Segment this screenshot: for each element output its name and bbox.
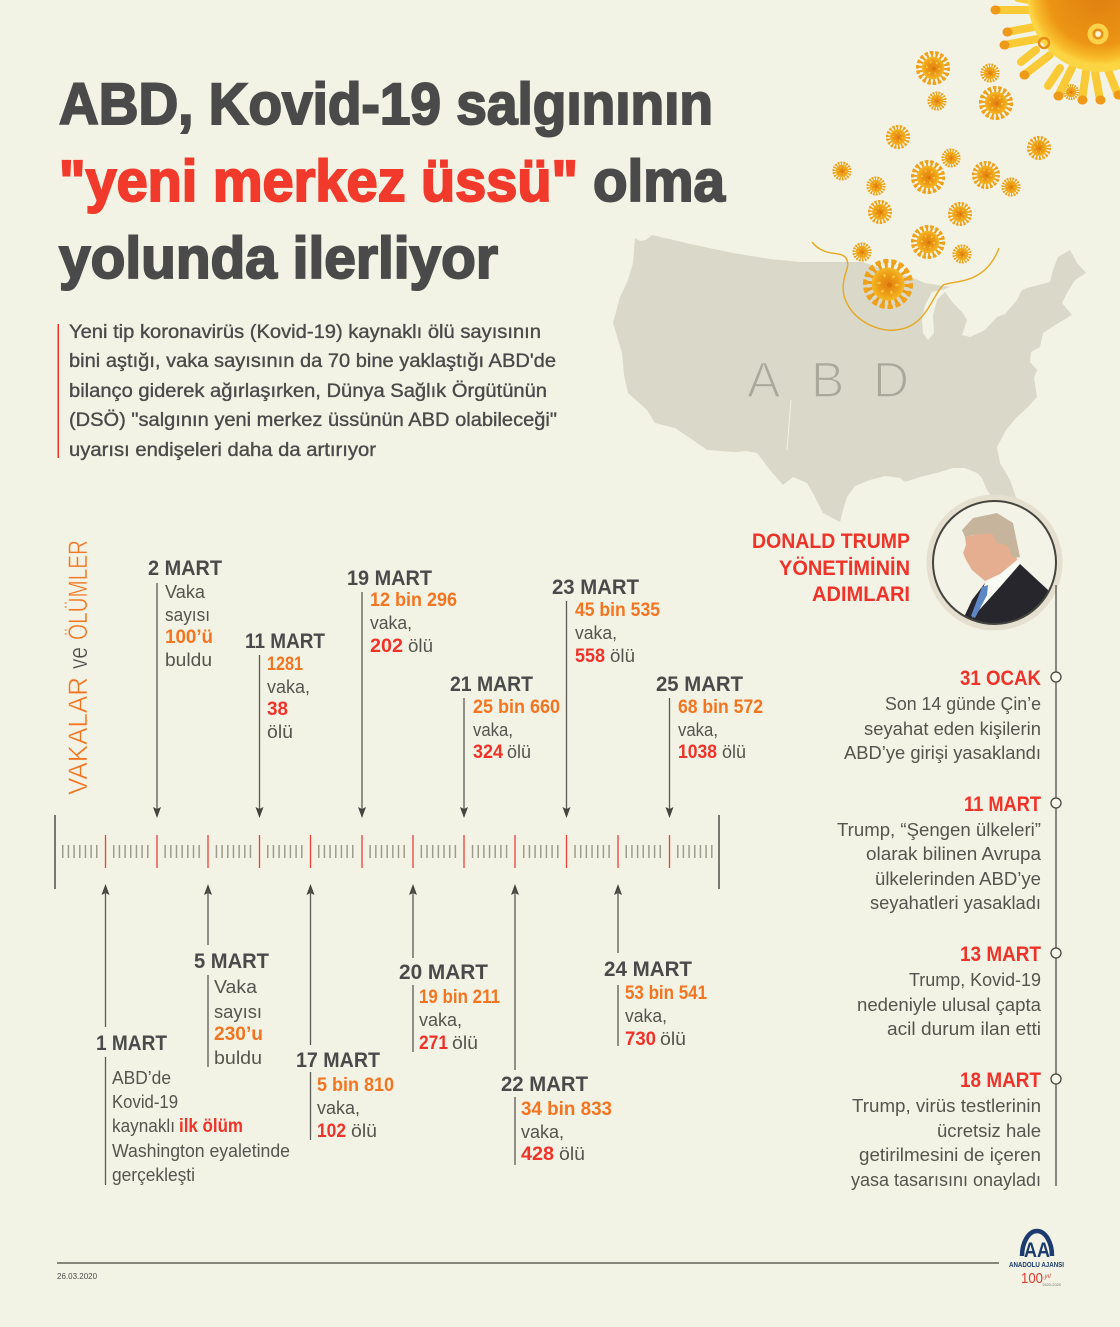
- event: 17 Mart: 102: [317, 1121, 346, 1142]
- event: 1 Mart: gerçekleşti: [112, 1164, 195, 1185]
- title: yolunda ilerliyor: [59, 226, 498, 291]
- event: 23 Mart: 23 MART: [552, 576, 639, 599]
- event: 25 Mart: 68 bin 572: [678, 697, 763, 718]
- event: 24 Mart: 730: [625, 1029, 656, 1050]
- event: 2 Mart: [148, 557, 222, 818]
- event: 11 Mart: 38: [267, 699, 288, 720]
- event: 25 Mart: ölü: [722, 741, 746, 762]
- event: 19 Mart: vaka,: [370, 612, 412, 633]
- event: 25 Mart: vaka,: [678, 719, 718, 740]
- step: 18 Mart: yasa tasarısını onayladı: [851, 1169, 1041, 1190]
- heading: Donald Trump: [752, 530, 910, 606]
- intro text block: bilanço giderek ağırlaşırken, Dünya Sağlık Örgütünün: [69, 380, 547, 402]
- map: ABD silhouette: [613, 235, 1086, 522]
- vertical label: ÖLÜMLER: [63, 540, 93, 640]
- event: 19 Mart: 202: [370, 636, 403, 657]
- event: 22 Mart: 428: [521, 1144, 554, 1165]
- step: 18 Mart: Trump, virüs testlerinin: [852, 1095, 1041, 1116]
- logo: Anadolu Ajansı: 100: [1021, 1270, 1043, 1287]
- event: 22 Mart: vaka,: [521, 1121, 564, 1142]
- icon: virus particles: [833, 52, 1078, 307]
- event: 23 Mart: [552, 576, 660, 818]
- event: 23 Mart: vaka,: [575, 622, 617, 643]
- event: 17 Mart: [296, 884, 394, 1142]
- event: 23 Mart: ölü: [610, 645, 635, 666]
- step: 11 Mart: [837, 793, 1061, 913]
- event: 19 Mart: ölü: [408, 635, 433, 656]
- event: 5 Mart: 5 MART: [194, 950, 269, 973]
- event: 23 Mart: 558: [575, 646, 605, 667]
- event: 20 Mart: 20 MART: [399, 961, 488, 984]
- event: 11 Mart: 11 MART: [245, 630, 325, 653]
- step: 13 Mart: 13 MART: [960, 943, 1041, 966]
- suit: [965, 564, 1048, 623]
- shirt collar: [972, 560, 1020, 618]
- heading: Donald Trump: DONALD TRUMP: [752, 530, 910, 553]
- event: 20 Mart: 19 bin 211: [419, 987, 500, 1008]
- event: 1 Mart: ABD’de: [112, 1067, 171, 1088]
- event: 21 Mart: ölü: [507, 741, 531, 762]
- step: 13 Mart: Trump, Kovid-19: [909, 969, 1041, 990]
- curve around large virus: [812, 242, 999, 330]
- event: 2 Mart: sayısı: [165, 604, 210, 625]
- step: 13 Mart: acil durum ilan etti: [887, 1018, 1041, 1039]
- step: 31 Ocak: seyahat eden kişilerin: [864, 718, 1041, 739]
- logo: Anadolu Ajansı: [1009, 1231, 1064, 1287]
- step: 31 Ocak: ABD’ye girişi yasaklandı: [844, 742, 1041, 763]
- event: 22 Mart: ölü: [559, 1143, 585, 1164]
- event: 11 Mart: [245, 630, 325, 818]
- portrait: Donald Trump: [930, 498, 1060, 640]
- event: 21 Mart: 324: [473, 742, 503, 763]
- event: 24 Mart: vaka,: [625, 1005, 667, 1026]
- step: 11 Mart: Trump, “Şengen ülkeleri”: [837, 819, 1041, 840]
- event: 21 Mart: [450, 673, 560, 818]
- label: ABD: B: [811, 352, 844, 408]
- logo: Anadolu Ajansı: AA: [1024, 1239, 1050, 1262]
- logo: Anadolu Ajansı: 1920-2020: [1042, 1282, 1062, 1287]
- label: ABD: A: [747, 352, 781, 408]
- event: 1 Mart: kaynaklı: [112, 1115, 175, 1136]
- event: 5 Mart: buldu: [214, 1047, 262, 1068]
- event: 22 Mart: 22 MART: [501, 1073, 588, 1096]
- logo: Anadolu Ajansı: .yıl: [1043, 1274, 1051, 1280]
- event: 1 Mart: 1 MART: [96, 1032, 167, 1055]
- event: 2 Mart: Vaka: [165, 581, 206, 602]
- event: 5 Mart: [194, 884, 269, 1068]
- event: 19 Mart: 12 bin 296: [370, 590, 457, 611]
- event: 25 Mart: 25 MART: [656, 673, 743, 696]
- step: 18 Mart: getirilmesini de içeren: [859, 1144, 1041, 1165]
- heading: Donald Trump: YÖNETİMİNİN: [779, 557, 910, 580]
- event: 19 Mart: [347, 567, 457, 818]
- event: 19 Mart: 19 MART: [347, 567, 432, 590]
- vertical label: [63, 540, 93, 795]
- event: 1 Mart: [96, 884, 290, 1185]
- timeline axis: [55, 815, 719, 889]
- event: 21 Mart: 21 MART: [450, 673, 533, 696]
- step: 18 Mart: [851, 1069, 1061, 1190]
- event: 2 Mart: 100’ü: [165, 627, 213, 648]
- event: 23 Mart: 45 bin 535: [575, 600, 660, 621]
- event: 21 Mart: vaka,: [473, 719, 513, 740]
- logo: Anadolu Ajansı: ANADOLU AJANSI: [1009, 1260, 1064, 1269]
- event: 24 Mart: ölü: [660, 1028, 686, 1049]
- step: 31 Ocak: [844, 667, 1061, 763]
- event: 17 Mart: ölü: [351, 1120, 377, 1141]
- title: ABD, Kovid-19 salgınının: [59, 72, 713, 137]
- event: 17 Mart: 17 MART: [296, 1049, 380, 1072]
- footer line and date: 26.03.2020: [57, 1272, 98, 1281]
- event: 2 Mart: 2 MART: [148, 557, 222, 580]
- hair: [962, 513, 1020, 558]
- step: 18 Mart: 18 MART: [960, 1069, 1041, 1092]
- event: 20 Mart: vaka,: [419, 1009, 462, 1030]
- event: 1 Mart: Washington eyaletinde: [112, 1140, 290, 1161]
- step: 13 Mart: nedeniyle ulusal çapta: [857, 994, 1042, 1015]
- event: 21 Mart: 25 bin 660: [473, 697, 560, 718]
- vertical label: ve: [63, 647, 93, 669]
- heading: Donald Trump: ADIMLARI: [812, 583, 910, 606]
- icon: large virus: [995, 0, 1120, 100]
- title: [59, 72, 726, 291]
- event: 24 Mart: [604, 884, 707, 1050]
- intro text block: bini aştığı, vaka sayısının da 70 bine yaklaştığı ABD'de: [69, 350, 556, 372]
- event: 22 Mart: [501, 884, 612, 1165]
- event: 17 Mart: 5 bin 810: [317, 1075, 394, 1096]
- event: 20 Mart: [399, 884, 500, 1054]
- event: 25 Mart: [656, 673, 763, 818]
- event: 11 Mart: vaka,: [267, 676, 310, 697]
- event: 22 Mart: 34 bin 833: [521, 1099, 612, 1120]
- step: 31 Ocak: 31 OCAK: [960, 667, 1041, 690]
- event: 11 Mart: ölü: [267, 721, 293, 742]
- event: 1 Mart: Kovid-19: [112, 1091, 178, 1112]
- event: 20 Mart: 271: [419, 1033, 448, 1054]
- event: 20 Mart: ölü: [452, 1032, 478, 1053]
- intro text block: uyarısı endişeleri daha da artırıyor: [69, 439, 377, 461]
- vertical label: VAKALAR: [63, 677, 93, 795]
- intro text block: [58, 321, 557, 461]
- step: 13 Mart: [857, 943, 1061, 1039]
- title: olma: [593, 149, 726, 214]
- step: 11 Mart: seyahatleri yasakladı: [870, 892, 1041, 913]
- step: 11 Mart: 11 MART: [964, 793, 1041, 816]
- step: 31 Ocak: Son 14 günde Çin’e: [885, 693, 1041, 714]
- event: 5 Mart: Vaka: [214, 976, 258, 997]
- event: 5 Mart: 230’u: [214, 1024, 263, 1045]
- event: 24 Mart: 24 MART: [604, 958, 692, 981]
- event: 17 Mart: vaka,: [317, 1097, 360, 1118]
- step: 11 Mart: ülkelerinden ABD’ye: [875, 868, 1041, 889]
- event: 24 Mart: 53 bin 541: [625, 983, 707, 1004]
- event: 1 Mart: ilk ölüm: [179, 1116, 243, 1137]
- intro text block: (DSÖ) "salgının yeni merkez üssünün ABD olabileceği": [69, 409, 557, 431]
- step: 11 Mart: olarak bilinen Avrupa: [866, 843, 1042, 864]
- neck and face: [963, 530, 1017, 581]
- intro text block: Yeni tip koronavirüs (Kovid-19) kaynaklı ölü sayısının: [69, 321, 541, 343]
- event: 25 Mart: 1038: [678, 742, 717, 763]
- event: 2 Mart: buldu: [165, 649, 212, 670]
- label: ABD: [747, 352, 909, 408]
- step: 18 Mart: ücretsiz hale: [937, 1120, 1041, 1141]
- label: ABD: D: [873, 352, 909, 408]
- title: "yeni merkez üssü": [59, 149, 578, 214]
- event: 11 Mart: 1281: [267, 654, 303, 675]
- vertical steps line: [1055, 585, 1057, 1186]
- tie: [971, 585, 988, 618]
- event: 5 Mart: sayısı: [214, 1001, 262, 1022]
